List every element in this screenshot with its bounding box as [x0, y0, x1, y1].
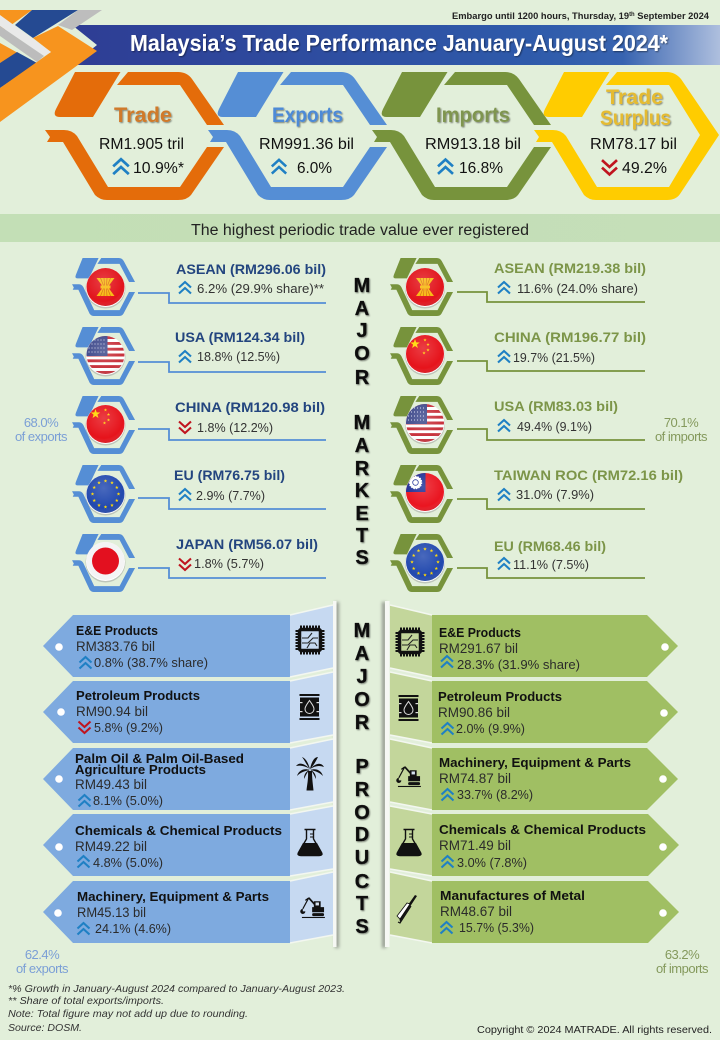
import product: E&E: 28.3% (31.9% share) [457, 657, 580, 672]
import product: E&E [390, 605, 678, 677]
export product: machinery: RM45.13 bil [77, 905, 146, 920]
callout: share of imports [655, 415, 708, 444]
embargo note: Embargo until 1200 hours, Thursday, 19 [452, 11, 632, 22]
headline strip [0, 214, 720, 242]
title banner [72, 25, 720, 65]
hexagon: imports [372, 72, 551, 200]
export market: USA: 18.8% (12.5%) [197, 350, 280, 364]
hexagon: imports: RM913.18 bil [425, 136, 521, 153]
heading: major products: C [355, 871, 369, 893]
export market: USA: USA (RM124.34 bil) [175, 329, 305, 345]
export product: chemicals: Chemicals & Chemical Products [75, 824, 282, 838]
import product: manufactures of metal: Manufactures of Metal [440, 889, 585, 903]
hexagon: exports [208, 72, 387, 200]
export product: palm oil [43, 739, 333, 810]
import market: USA: USA (RM83.03 bil) [494, 398, 618, 414]
heading: major markets [354, 275, 370, 569]
import product: machinery: Machinery, Equipment & Parts [439, 756, 631, 770]
callout: share of imports: of imports [655, 429, 708, 444]
import market: ASEAN [390, 258, 646, 316]
hexagon: imports: Imports [436, 104, 510, 127]
heading: major markets: A [355, 298, 369, 320]
hexagon: trade surplus: Surplus [600, 107, 671, 130]
heading: major markets: R [355, 458, 370, 480]
import product: chemicals: Chemicals & Chemical Products [439, 823, 646, 837]
export market: Japan [72, 534, 326, 592]
callout: share of imports: 70.1% [664, 415, 699, 430]
export product: palm oil: RM49.43 bil [75, 777, 147, 792]
import market: ASEAN: ASEAN (RM219.38 bil) [494, 260, 646, 276]
import product: manufactures of metal: 15.7% (5.3%) [459, 920, 534, 935]
heading: major markets: S [355, 547, 369, 569]
export market: China: CHINA (RM120.98 bil) [175, 399, 325, 415]
import product: manufactures of metal [390, 872, 679, 943]
import product: petroleum: RM90.86 bil [438, 705, 510, 720]
hexagon: trade: Trade [114, 104, 172, 127]
import market: USA [390, 396, 645, 454]
heading: major products [354, 620, 370, 938]
import market: USA: 49.4% (9.1%) [517, 420, 592, 434]
export market: Japan: JAPAN (RM56.07 bil) [176, 536, 318, 552]
export market: ASEAN: 6.2% (29.9% share)** [197, 282, 324, 296]
heading: major products: S [355, 916, 369, 938]
heading: major products: M [354, 620, 370, 642]
divider bars [333, 601, 390, 948]
hexagon: trade: RM1.905 tril [99, 136, 184, 153]
import market: China: CHINA (RM196.77 bil) [494, 329, 646, 345]
import product: chemicals [390, 806, 679, 876]
heading: major products: U [355, 847, 369, 869]
heading: major products: O [354, 802, 370, 824]
export product: E&E: RM383.76 bil [76, 639, 155, 654]
import market: EU: 11.1% (7.5%) [513, 558, 589, 572]
heading: major markets: R [355, 367, 370, 389]
import market: ASEAN: 11.6% (24.0% share) [517, 282, 638, 296]
export product: chemicals [43, 806, 333, 876]
title banner: Malaysia’s Trade Performance January-August 2024* [130, 30, 668, 56]
import market: China: 19.7% (21.5%) [513, 351, 595, 365]
hexagon: trade surplus: 49.2% [622, 160, 667, 177]
heading: major markets: E [355, 503, 369, 525]
import market: Taiwan: 31.0% (7.9%) [516, 488, 594, 502]
export product: E&E: E&E Products [76, 624, 158, 638]
heading: major markets: M [354, 412, 370, 434]
export market: EU: 2.9% (7.7%) [196, 489, 265, 503]
import product: machinery: RM74.87 bil [439, 771, 511, 786]
export product: chemicals: RM49.22 bil [75, 839, 147, 854]
hexagon: trade: 10.9%* [133, 160, 184, 177]
import product: petroleum: 2.0% (9.9%) [456, 721, 525, 736]
export product: E&E [43, 605, 333, 677]
footnotes: Source: DOSM. [8, 1022, 82, 1034]
heading: major markets: A [355, 435, 369, 457]
footnotes [8, 983, 345, 1034]
heading: major markets: K [355, 480, 370, 502]
export product: palm oil: Palm Oil & Palm Oil-Based [75, 752, 244, 766]
embargo note: th [629, 12, 635, 18]
callout: products share of imports: of imports [656, 961, 709, 976]
import market: China [390, 327, 646, 385]
logo chevrons [0, 10, 102, 122]
export market: EU: EU (RM76.75 bil) [174, 467, 285, 483]
hexagon: imports: 16.8% [459, 160, 503, 177]
export market: USA [72, 327, 326, 385]
export market: ASEAN: ASEAN (RM296.06 bil) [176, 261, 326, 277]
hexagon: exports: 6.0% [297, 160, 332, 177]
export product: chemicals: 4.8% (5.0%) [93, 855, 163, 870]
import product: petroleum: Petroleum Products [438, 690, 562, 704]
heading: major markets: J [356, 320, 368, 342]
heading: major markets: O [354, 343, 370, 365]
export product: palm oil: Agriculture Products [75, 763, 206, 777]
import market: Taiwan: TAIWAN ROC (RM72.16 bil) [494, 467, 683, 483]
import product: chemicals: 3.0% (7.8%) [457, 855, 527, 870]
export market: Japan: 1.8% (5.7%) [194, 557, 264, 571]
export market: ASEAN [72, 258, 326, 316]
hexagon: trade surplus: Trade [606, 86, 663, 109]
embargo note: September 2024 [635, 11, 710, 22]
export market: EU [72, 465, 326, 523]
hexagon: exports: RM991.36 bil [259, 136, 354, 153]
heading: major products: T [356, 893, 368, 915]
export product: E&E: 0.8% (38.7% share) [94, 655, 208, 670]
hexagon: trade surplus [534, 72, 719, 200]
heading: major markets: M [354, 275, 370, 297]
callout: products share of imports: 63.2% [665, 947, 700, 962]
heading: major markets: T [356, 525, 368, 547]
heading: major products: R [355, 712, 370, 734]
import product: E&E: E&E Products [439, 626, 521, 640]
import market: Taiwan [390, 465, 683, 523]
export product: petroleum: Petroleum Products [76, 689, 200, 703]
hexagon: exports: Exports [272, 104, 343, 127]
footnotes: ** Share of total exports/imports. [8, 995, 164, 1007]
callout: share of exports: of exports [15, 429, 68, 444]
callout: products share of exports: of exports [16, 961, 69, 976]
heading: major products: J [356, 666, 368, 688]
export market: China [72, 396, 326, 454]
export product: petroleum [43, 672, 333, 743]
heading: major products: D [355, 824, 369, 846]
export product: machinery: Machinery, Equipment & Parts [77, 890, 269, 904]
callout: share of exports [15, 415, 68, 444]
hexagon: trade [45, 72, 224, 200]
export product: palm oil: 8.1% (5.0%) [93, 793, 163, 808]
heading: major products: A [355, 643, 369, 665]
import market: EU: EU (RM68.46 bil) [494, 538, 606, 554]
callout: products share of imports [656, 947, 709, 976]
headline strip: The highest periodic trade value ever registered [191, 222, 529, 239]
heading: major products: O [354, 689, 370, 711]
footnotes: Note: Total figure may not add up due to rounding. [8, 1008, 248, 1020]
import product: chemicals: RM71.49 bil [439, 838, 511, 853]
import product: petroleum [390, 672, 678, 743]
callout: share of exports: 68.0% [24, 415, 59, 430]
export market: China: 1.8% (12.2%) [197, 421, 273, 435]
callout: products share of exports: 62.4% [25, 947, 60, 962]
copyright: Copyright © 2024 MATRADE. All rights reserved. [477, 1024, 712, 1036]
heading: major products: R [355, 779, 370, 801]
heading: major products: P [355, 756, 369, 778]
export product: petroleum: RM90.94 bil [76, 704, 148, 719]
import product: E&E: RM291.67 bil [439, 641, 518, 656]
footnotes: *% Growth in January-August 2024 compared to January-August 2023. [8, 983, 345, 995]
import market: EU [390, 534, 645, 592]
hexagon: trade surplus: RM78.17 bil [590, 136, 677, 153]
import product: manufactures of metal: RM48.67 bil [440, 904, 512, 919]
callout: products share of exports [16, 947, 69, 976]
import product: machinery: 33.7% (8.2%) [457, 787, 533, 802]
import product: machinery [390, 739, 678, 810]
export product: petroleum: 5.8% (9.2%) [94, 720, 163, 735]
export product: machinery: 24.1% (4.6%) [95, 921, 171, 936]
export product: machinery [43, 872, 333, 943]
